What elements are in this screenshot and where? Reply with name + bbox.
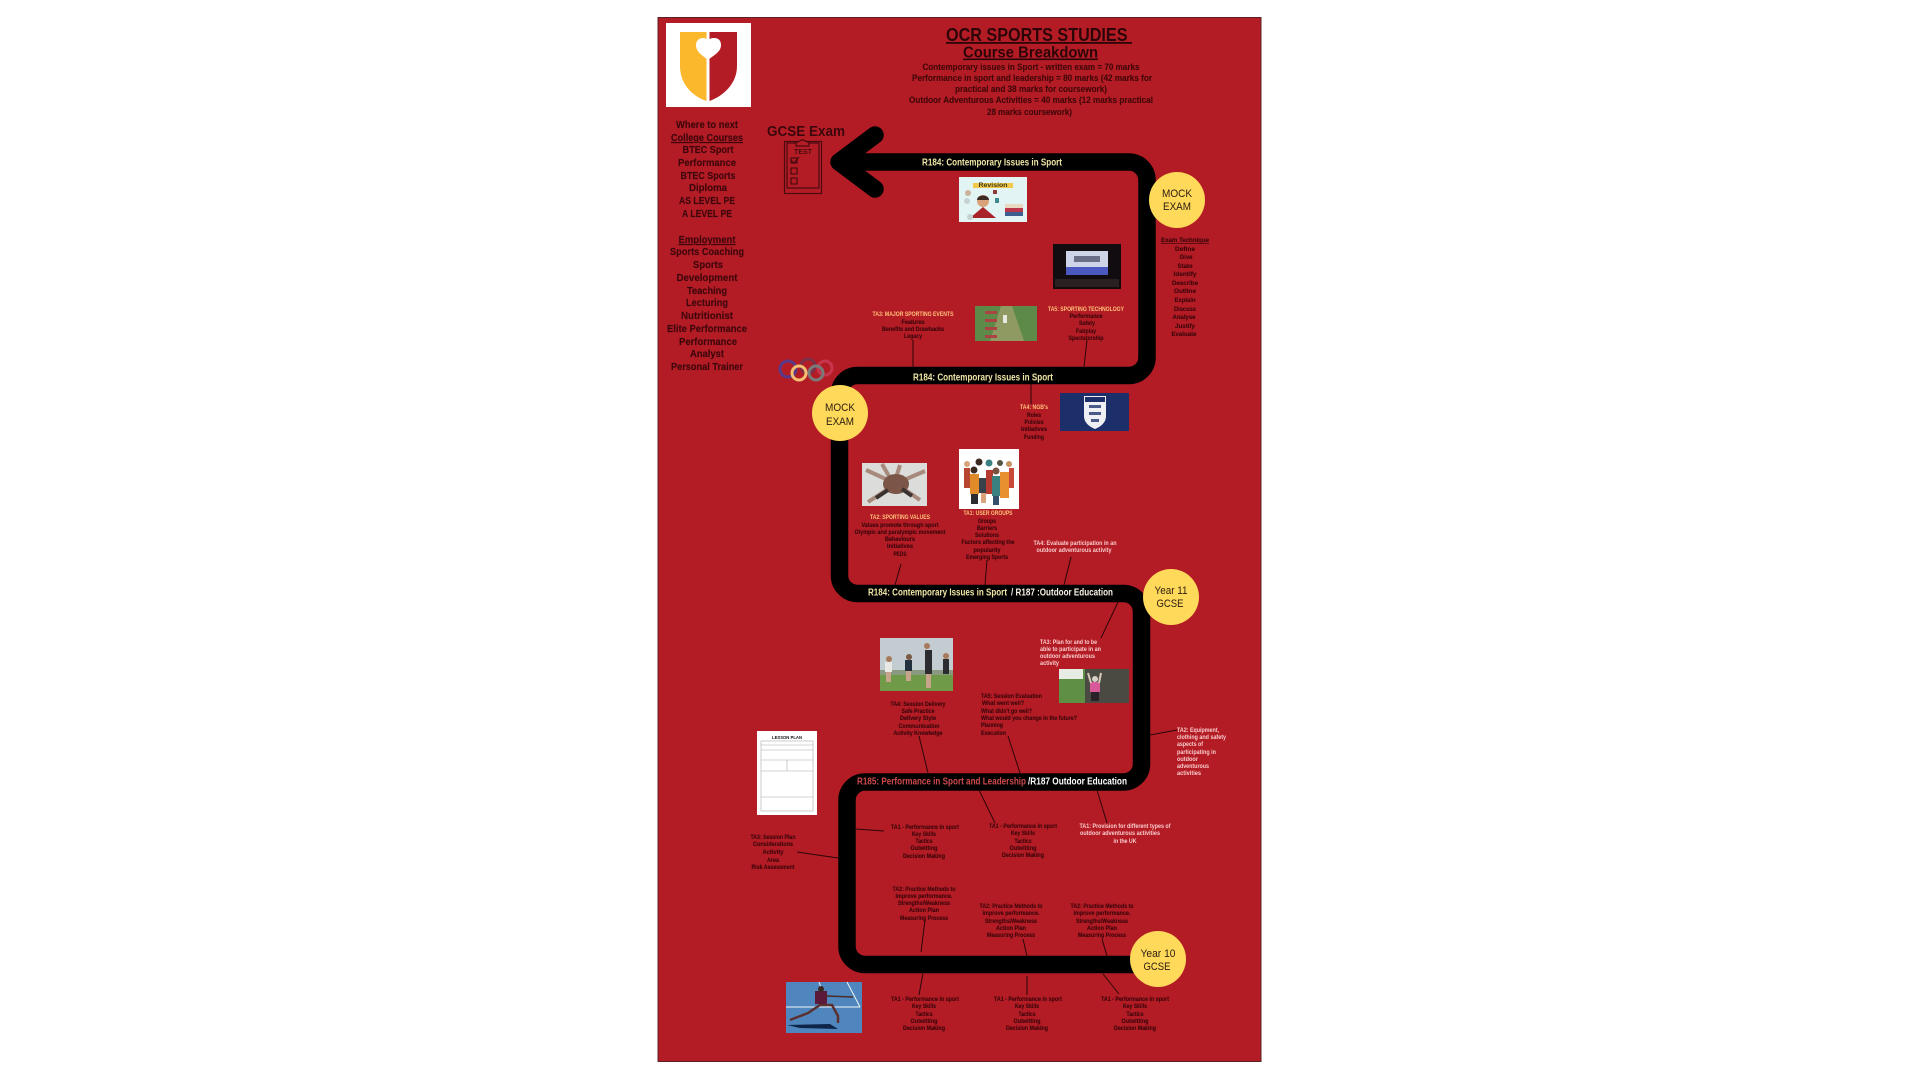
text: TA1 performance in sport, bottom right: Outwitting — [1122, 1019, 1149, 1025]
text: TA1 performance in sport, bottom middle: Decision Making — [1006, 1026, 1048, 1032]
text: TA2 practice methods, middle: Strengths/Weakness — [985, 919, 1038, 925]
text: TA1 performance in sport, bottom middle — [994, 997, 1062, 1032]
where to next column: Nutritionist — [681, 310, 733, 322]
text: TA4 session delivery — [890, 702, 946, 737]
exam technique list: Outline — [1174, 289, 1197, 295]
text: TA4 session delivery: Safe Practice — [902, 709, 935, 715]
where to next column: Teaching — [687, 285, 727, 297]
exam technique list: Identify — [1174, 272, 1197, 278]
text: TA1 performance in sport, bottom left: Tactics — [916, 1012, 933, 1018]
text: TA2 sporting values: Behaviours — [885, 537, 916, 543]
image: lesson plan sheet: LESSON PLAN — [772, 735, 802, 740]
where to next column: Employment — [678, 234, 736, 246]
text: TA2 sporting values — [854, 515, 946, 558]
text: TA1 user groups — [962, 511, 1015, 561]
text: TA4 session delivery: Activity Knowledge — [894, 731, 943, 737]
text: TA3 major sporting events — [872, 312, 954, 340]
text: TA1 user groups: Factors affecting the — [962, 540, 1015, 546]
text: TA2 practice methods, middle: improve performance. — [982, 911, 1040, 917]
text: TA2 practice methods, left: Action Plan — [909, 908, 939, 914]
text: TA2 practice methods, left: improve performance. — [896, 894, 953, 900]
text: TA5 sporting technology: Spectatorship — [1068, 336, 1104, 342]
text: TA2 equipment clothing and safety — [1177, 728, 1227, 777]
text: TA1 performance in sport, upper left — [891, 825, 959, 860]
text: TA2 practice methods, right: improve performance. — [1074, 911, 1131, 917]
text: TA3 plan for outdoor activity: activity — [1040, 661, 1060, 667]
pathway label: R184 and R187: / R187 :Outdoor Education — [1011, 588, 1113, 598]
course marks summary: Outdoor Adventurous Activities = 40 marks (12 marks practical — [909, 95, 1153, 105]
text: TA4 NGBs: Roles — [1027, 413, 1042, 419]
where to next column: A LEVEL PE — [682, 208, 732, 220]
image: revision — [959, 177, 1027, 222]
text: TA5 sporting technology: Performance — [1070, 314, 1103, 320]
where to next column: Where to next — [676, 119, 738, 131]
heading: GCSE Exam: GCSE Exam — [767, 124, 845, 140]
course marks summary — [909, 62, 1153, 117]
text: TA3 plan for outdoor activity: able to participate in an — [1040, 647, 1101, 653]
image: session delivery football coaching — [880, 638, 953, 691]
text: TA5 session evaluation: TA5: Session Evaluation — [981, 694, 1042, 700]
text: TA2 equipment clothing and safety: clothing and safety — [1177, 735, 1227, 741]
pathway label: R185 and R187: R185: Performance in Sport and Leadership — [857, 776, 1026, 788]
text: TA1 performance in sport, upper left: Decision Making — [903, 854, 945, 860]
image: user groups people — [959, 449, 1019, 509]
course marks summary: practical and 38 marks for coursework) — [955, 84, 1107, 94]
text: TA3 session plan considerations: TA3: Session Plan — [750, 835, 796, 841]
text: TA1 performance in sport, bottom middle: Outwitting — [1014, 1019, 1041, 1025]
text: TA1 user groups: Barriers — [977, 526, 998, 532]
text: TA2 practice methods, right: Action Plan — [1087, 926, 1117, 932]
where to next column: AS LEVEL PE — [679, 195, 735, 207]
text: TA1 user groups: popularity — [974, 548, 1001, 554]
text: TA2 practice methods, left: Strengths/Weakness — [898, 901, 951, 907]
text: TA3 session plan considerations — [750, 835, 796, 871]
text: TA5 session evaluation — [981, 694, 1077, 737]
where to next column: Analyst — [690, 348, 724, 360]
text: TA2 equipment clothing and safety: activities — [1177, 771, 1202, 777]
text: TA2 practice methods, right: TA2: Practice Methods to — [1070, 904, 1134, 910]
text: TA1 performance in sport, upper left: Key Skills — [912, 832, 937, 838]
logo: shield on white square — [666, 23, 751, 107]
where to next column: Lecturing — [686, 297, 728, 309]
text: TA5 session evaluation: What didn't go well? — [981, 709, 1032, 715]
text: TA5 sporting technology — [1048, 307, 1124, 342]
text: TA2 practice methods, right — [1070, 904, 1134, 939]
text: TA2 practice methods, middle: Action Plan — [996, 926, 1026, 932]
text: TA1 performance in sport, upper middle: Outwitting — [1010, 846, 1037, 852]
text: TA4 NGBs: Initiatives — [1021, 427, 1048, 433]
text: TA3 major sporting events: TA3: MAJOR SPORTING EVENTS — [872, 312, 954, 318]
text: TA1 user groups: Groups — [978, 519, 997, 525]
where to next column: Elite Performance — [667, 323, 747, 335]
badge: mock exam left — [812, 385, 868, 441]
text: TA5 session evaluation: Planning — [981, 723, 1003, 729]
pathway label: R185 and R187: /R187 Outdoor Education — [1028, 776, 1127, 788]
text: TA5 session evaluation: What would you change in the future? — [981, 716, 1077, 722]
text: TA2 practice methods, left: Measuring Process — [900, 916, 949, 922]
text: TA5 sporting technology: Fairplay — [1076, 329, 1097, 335]
text: TA2 sporting values: Values promote through sport — [862, 523, 938, 529]
text: TA2 practice methods, middle: Measuring Process — [987, 933, 1036, 939]
pathway: black winding road with arrow — [839, 135, 1158, 964]
image: tennis player on blue court — [786, 982, 862, 1033]
text: TA3 major sporting events: Legacy — [904, 334, 923, 340]
text: TA1 performance in sport, upper middle — [989, 824, 1057, 859]
text: TA1 performance in sport, bottom left: Decision Making — [903, 1026, 945, 1032]
text: TA4 evaluate participation: outdoor adventurous activity — [1036, 548, 1112, 554]
image: sporting technology presentation — [1053, 244, 1121, 289]
text: TA2 sporting values: PEDS — [894, 552, 906, 558]
exam technique list: Explain — [1174, 298, 1196, 304]
text: TA3 plan for outdoor activity: TA3: Plan for and to be — [1040, 640, 1098, 646]
where to next column: Personal Trainer — [671, 361, 743, 373]
text: TA1 performance in sport, upper left: Outwitting — [910, 846, 938, 852]
text: TA3 session plan considerations: Activity — [762, 850, 784, 856]
text: TA1 performance in sport, upper middle: Key Skills — [1011, 831, 1036, 837]
text: TA1 user groups: TA1: USER GROUPS — [964, 511, 1012, 517]
badge: mock exam top right — [1149, 172, 1205, 228]
text: TA2 equipment clothing and safety: adventurous — [1177, 764, 1210, 770]
text: TA4 session delivery: Delivery Style — [900, 716, 937, 722]
exam technique list: Give — [1180, 255, 1193, 261]
text: TA4 NGBs: Funding — [1024, 435, 1044, 441]
text: TA2 practice methods, left: TA2: Practice Methods to — [892, 887, 956, 893]
text: TA1 performance in sport, bottom right: Decision Making — [1114, 1026, 1156, 1032]
exam technique list: Analyse — [1172, 315, 1196, 321]
text: TA2 sporting values: TA2: SPORTING VALUES — [870, 515, 930, 521]
exam technique list: Evaluate — [1172, 332, 1197, 338]
text: TA1 provision for outdoor activities — [1080, 824, 1171, 845]
text: TA1 performance in sport, upper middle: Tactics — [1014, 839, 1032, 845]
text: TA2 practice methods, middle — [980, 904, 1043, 939]
badge: mock exam left: EXAM — [826, 416, 854, 428]
title: Course Breakdown — [963, 44, 1098, 62]
image: revision: Revision — [978, 182, 1008, 189]
text: TA2 equipment clothing and safety: TA2: Equipment, — [1177, 728, 1219, 734]
panel: red poster background — [658, 18, 1261, 1062]
image: the FA crest on navy — [1060, 393, 1129, 431]
exam technique list: Define — [1175, 247, 1196, 253]
text: TA5 session evaluation: What went well? — [982, 701, 1024, 707]
exam technique list: State — [1178, 264, 1193, 270]
text: TA1 performance in sport, upper middle: Decision Making — [1002, 853, 1044, 859]
text: TA1 provision for outdoor activities: TA1: Provision for different types of — [1080, 824, 1171, 830]
badge: mock exam top right: EXAM — [1163, 201, 1191, 213]
text: TA1 performance in sport, bottom left: TA1 - Performance in sport — [891, 997, 959, 1003]
where to next column: BTEC Sport — [682, 144, 734, 156]
text: TA1 performance in sport, upper left: TA1 - Performance in sport — [891, 825, 959, 831]
badge: mock exam left: MOCK — [825, 402, 856, 414]
where to next column: Diploma — [689, 182, 727, 194]
text: TA1 provision for outdoor activities: in the UK — [1114, 839, 1137, 845]
text: TA3 plan for outdoor activity: outdoor adventurous — [1040, 654, 1096, 660]
text: TA4 NGBs: Policies — [1024, 420, 1044, 426]
title: OCR SPORTS STUDIES — [946, 25, 1132, 45]
where to next column — [667, 119, 747, 373]
image: sporting values hands — [862, 463, 927, 506]
icon: olympic rings — [780, 359, 832, 380]
text: TA3 session plan considerations: Area — [767, 858, 780, 864]
text: TA2 equipment clothing and safety: outdoor — [1177, 757, 1199, 763]
where to next column: Performance — [678, 157, 736, 169]
text: TA1 performance in sport, bottom right — [1101, 997, 1169, 1032]
course marks summary: 28 marks coursework) — [987, 107, 1072, 117]
exam technique list: Describe — [1172, 281, 1199, 287]
text: TA5 sporting technology: TA5: SPORTING TECHNOLOGY — [1048, 307, 1124, 313]
exam technique list: Exam Technique — [1161, 238, 1210, 244]
text: TA5 sporting technology: Safety — [1079, 321, 1096, 327]
text: TA1 performance in sport, bottom left — [891, 997, 959, 1032]
title — [946, 25, 1132, 62]
text: TA2 equipment clothing and safety: aspects of — [1177, 742, 1204, 748]
text: TA1 performance in sport, bottom middle: Key Skills — [1015, 1004, 1040, 1010]
badge: Year 11 GCSE: Year 11 — [1154, 585, 1188, 597]
text: TA1 performance in sport, bottom middle: TA1 - Performance in sport — [994, 997, 1062, 1003]
text: TA1 performance in sport, bottom right: TA1 - Performance in sport — [1101, 997, 1169, 1003]
text: TA2 equipment clothing and safety: participating in — [1177, 750, 1216, 756]
where to next column: College Courses — [671, 132, 743, 144]
text: TA1 performance in sport, upper left: Tactics — [916, 839, 933, 845]
text: TA3 major sporting events: Features — [902, 320, 925, 326]
text: TA3 session plan considerations: Considerations — [753, 842, 794, 848]
badge: mock exam top right: MOCK — [1162, 188, 1193, 200]
text: TA1 performance in sport, bottom right: Key Skills — [1123, 1004, 1148, 1010]
badge: Year 11 GCSE — [1143, 569, 1199, 625]
course marks summary: Performance in sport and leadership = 80 marks (42 marks for — [912, 73, 1152, 83]
text: TA1 provision for outdoor activities: outdoor adventurous activities — [1080, 831, 1161, 837]
text: TA2 practice methods, right: Measuring Process — [1078, 933, 1127, 939]
badge: Year 10 GCSE: Year 10 — [1140, 948, 1176, 960]
where to next column: Development — [676, 272, 738, 284]
pathway label: R184 top: R184: Contemporary Issues in Sport — [922, 158, 1063, 168]
where to next column: Sports Coaching — [670, 246, 744, 258]
icon: test clipboard — [784, 140, 822, 194]
text: TA3 session plan considerations: Risk Assessment — [752, 865, 794, 871]
where to next column: BTEC Sports — [680, 170, 736, 182]
pathway label: R184 and R187: R184: Contemporary Issues in Sport — [868, 588, 1008, 598]
text: TA4 NGBs — [1020, 405, 1049, 441]
image: climbing outdoor activity — [1059, 669, 1129, 703]
text: TA4 session delivery: Communication — [898, 724, 940, 730]
badge: Year 10 GCSE — [1130, 931, 1186, 987]
text: TA1 user groups: Solutions — [975, 533, 1000, 539]
pathway label: R184 second: R184: Contemporary Issues in Sport — [913, 372, 1054, 384]
text: TA2 practice methods, right: Strengths/Weakness — [1076, 919, 1129, 925]
where to next column: Sports — [693, 259, 723, 271]
badge: Year 11 GCSE: GCSE — [1156, 598, 1184, 610]
text: TA3 plan for outdoor activity — [1040, 640, 1101, 667]
text: TA3 major sporting events: Benefits and Drawbacks — [882, 327, 945, 333]
icon: test clipboard: TEST — [794, 149, 813, 156]
text: TA4 evaluate participation: TA4: Evaluate participation in an — [1034, 541, 1117, 547]
exam technique list: Justify — [1175, 324, 1196, 330]
text: TA4 evaluate participation — [1034, 541, 1117, 554]
text: TA2 practice methods, left — [892, 887, 956, 922]
text: TA2 sporting values: Initiatives — [887, 544, 914, 550]
image: lesson plan sheet — [757, 731, 817, 815]
badge: Year 10 GCSE: GCSE — [1144, 961, 1170, 973]
text: TA1 performance in sport, bottom middle: Tactics — [1018, 1012, 1036, 1018]
text: TA5 session evaluation: Execution — [981, 731, 1006, 737]
exam technique list — [1161, 238, 1210, 338]
text: TA1 performance in sport, upper middle: TA1 - Performance in sport — [989, 824, 1057, 830]
text: TA1 performance in sport, bottom left: Outwitting — [910, 1019, 938, 1025]
text: TA1 performance in sport, bottom left: Key Skills — [912, 1004, 937, 1010]
where to next column: Performance — [679, 336, 737, 348]
connector lines — [797, 340, 1177, 995]
text: TA4 NGBs: TA4: NGB's — [1020, 405, 1049, 411]
text: TA1 user groups: Emerging Sports — [966, 555, 1009, 561]
exam technique list: Discuss — [1174, 307, 1197, 313]
text: TA4 session delivery: TA4: Session Delivery — [890, 702, 946, 708]
image: major sporting event cricket pitch — [975, 306, 1037, 341]
course marks summary: Contemporary issues in Sport - written exam = 70 marks — [922, 62, 1140, 72]
text: TA2 practice methods, middle: TA2: Practice Methods to — [980, 904, 1043, 910]
text: TA2 sporting values: Olympic and paralympic movement — [854, 530, 946, 536]
text: TA1 performance in sport, bottom right: Tactics — [1126, 1012, 1144, 1018]
